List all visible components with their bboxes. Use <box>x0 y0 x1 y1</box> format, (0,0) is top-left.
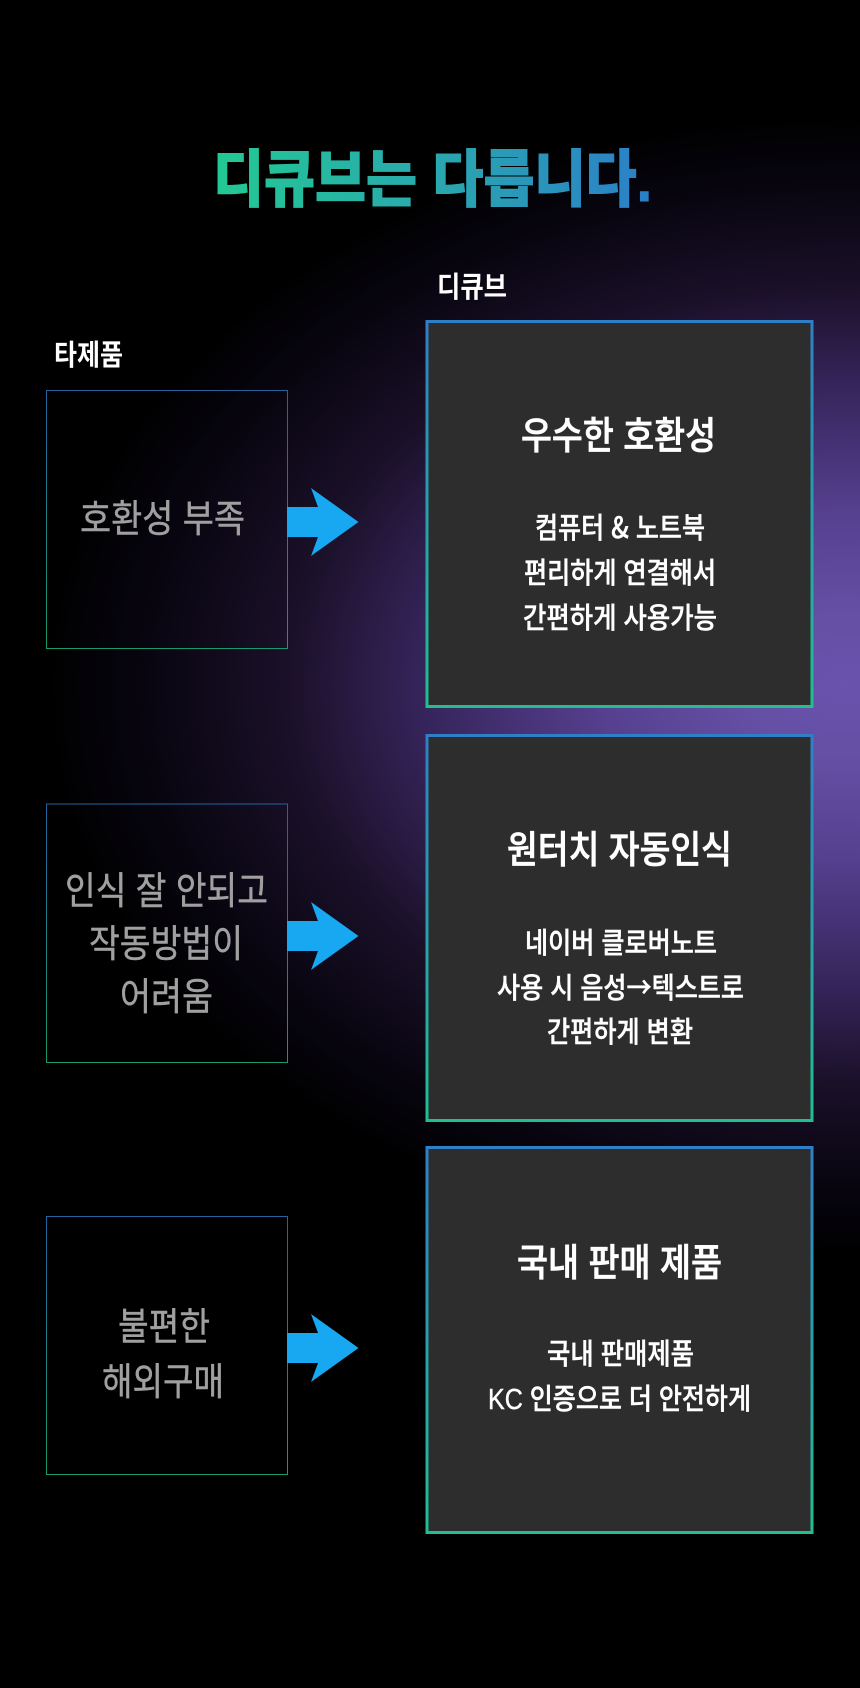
text: description 1: 간편하게 사용가능 <box>523 595 717 637</box>
text: description 3 <box>488 1331 751 1416</box>
text: poor recognition <box>65 860 268 1021</box>
text: description 1: 편리하게 연결해서 <box>524 550 716 592</box>
text: lack of compatibility: 호환성 부족 <box>80 488 245 543</box>
text: poor recognition: 어려움 <box>120 966 213 1021</box>
text: description 2: 사용 시 음성→텍스트로 <box>497 965 744 1007</box>
arrow 1 <box>287 488 358 556</box>
text: inconvenient overseas purchase: 불편한 <box>118 1296 210 1351</box>
heading: excellent compatibility: 우수한 호환성 <box>521 405 716 460</box>
text: description 1: 컴퓨터 & 노트북 <box>535 505 705 547</box>
panel: dcube 2 <box>427 736 812 1120</box>
text: description 2 <box>497 920 744 1051</box>
text: description 3: KC 인증으로 더 안전하게 <box>488 1383 751 1416</box>
title: 디큐브는 다릅니다. <box>213 129 652 219</box>
panel: other product 2 <box>46 804 288 1062</box>
arrow 2 <box>287 902 358 970</box>
heading: one-touch auto recognition: 원터치 자동인식 <box>507 819 732 874</box>
text: inconvenient overseas purchase <box>102 1296 224 1406</box>
panel: dcube 1 <box>427 322 812 706</box>
text: description 2: 네이버 클로버노트 <box>525 920 717 962</box>
text: description 3: 국내 판매제품 <box>547 1331 694 1373</box>
panel: other product 1 <box>46 390 288 648</box>
text: poor recognition: 작동방법이 <box>89 913 243 968</box>
panel: dcube 3 <box>427 1148 812 1532</box>
text: inconvenient overseas purchase: 해외구매 <box>102 1351 224 1406</box>
text: poor recognition: 인식 잘 안되고 <box>65 860 268 915</box>
label: dcube: 디큐브 <box>437 264 507 306</box>
arrow 3 <box>287 1314 358 1382</box>
text: description 2: 간편하게 변환 <box>547 1009 693 1051</box>
panel: other product 3 <box>46 1216 288 1474</box>
label: other products: 타제품 <box>54 332 123 374</box>
heading: domestic product: 국내 판매 제품 <box>517 1232 722 1287</box>
text: description 1 <box>523 505 717 637</box>
